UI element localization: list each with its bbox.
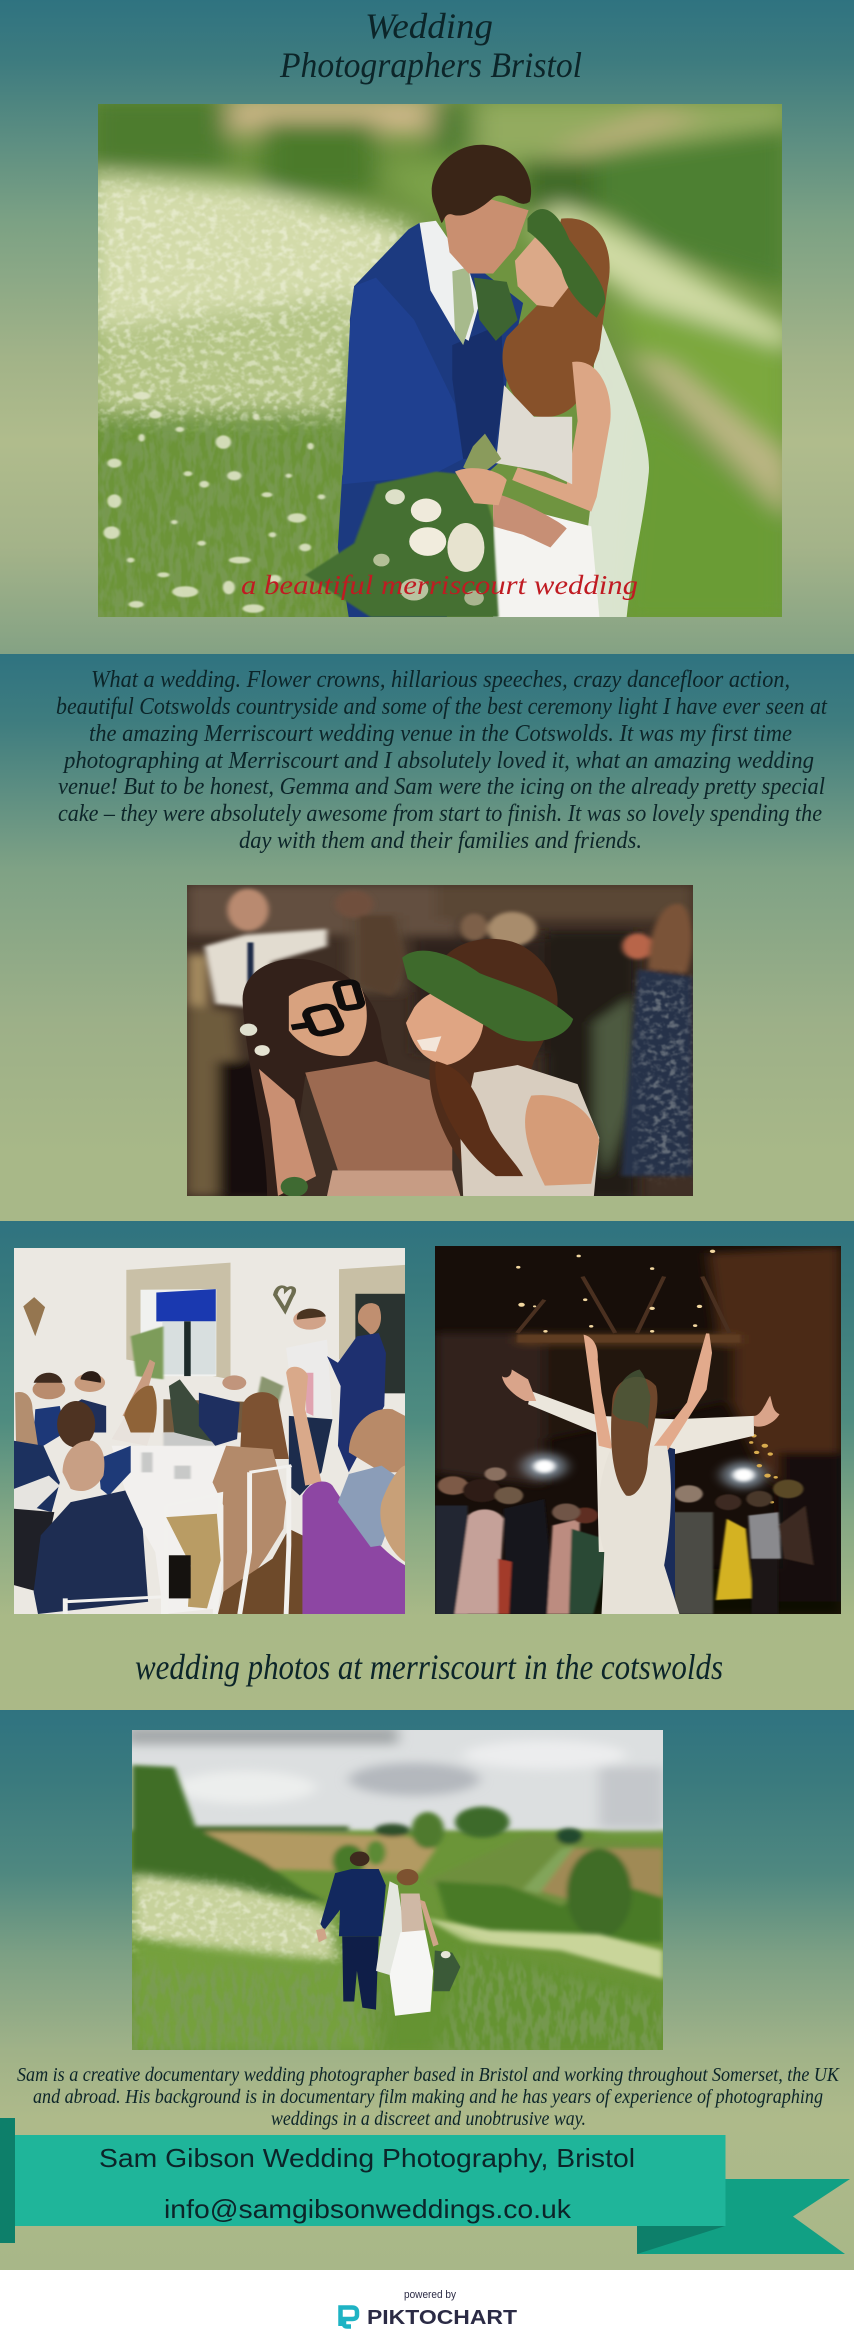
guests left	[14, 1359, 246, 1614]
story paragraph: What a wedding. Flower crowns, hillarious speeches, crazy dancefloor action,	[91, 667, 790, 693]
couple from behind	[316, 1851, 460, 2016]
footer: powered by Piktochart	[338, 2289, 517, 2329]
couple with raised arms	[502, 1334, 780, 1614]
bride	[493, 209, 649, 617]
bio paragraph: weddings in a discreet and unobtrusive way.	[271, 2108, 586, 2130]
section background: about	[0, 1710, 854, 2270]
banner name: Sam Gibson Wedding Photography, Bristol	[99, 2143, 635, 2173]
photo: couple walking through the countryside	[132, 1730, 663, 2050]
photo: couple in flower meadow	[98, 104, 782, 617]
photo: bride and friend on dancefloor	[187, 885, 693, 1196]
friend with glasses	[240, 959, 460, 1197]
crowd	[435, 1467, 814, 1615]
banner email: info@samgibsonweddings.co.uk	[164, 2194, 572, 2224]
story paragraph: the amazing Merriscourt wedding venue in the Cotswolds. It was my first time	[89, 721, 792, 747]
section background: story	[0, 654, 854, 1221]
standing men	[286, 1303, 386, 1496]
groom	[338, 145, 531, 617]
section background: hero	[0, 0, 854, 654]
story paragraph: day with them and their families and friends.	[239, 828, 642, 854]
bouquet	[305, 434, 507, 617]
title: Photographers Bristol	[279, 45, 582, 85]
meadow flower clusters	[103, 392, 325, 613]
title: Wedding	[365, 6, 493, 46]
bride with flower crown	[402, 939, 599, 1196]
photo caption: a beautiful merriscourt wedding	[241, 570, 638, 600]
title	[279, 6, 582, 85]
photo: guests toasting at reception table	[14, 1248, 405, 1614]
story paragraph: photographing at Merriscourt and I absolutely loved it, what an amazing wedding	[62, 748, 814, 774]
photo: bride and groom first dance	[435, 1246, 841, 1614]
footer: powered by Piktochart: powered by	[404, 2289, 456, 2301]
guests right with purple sleeve	[65, 1367, 405, 1614]
bio paragraph	[17, 2064, 840, 2130]
section background: gallery	[0, 1221, 854, 1710]
logo wordmark: PIKTOCHART	[367, 2307, 517, 2329]
table	[112, 1446, 237, 1614]
ribbon banner with contact details	[0, 2118, 850, 2254]
story paragraph	[56, 667, 828, 854]
blurred dancefloor guests	[204, 889, 693, 1176]
logo icon	[340, 2308, 357, 2326]
